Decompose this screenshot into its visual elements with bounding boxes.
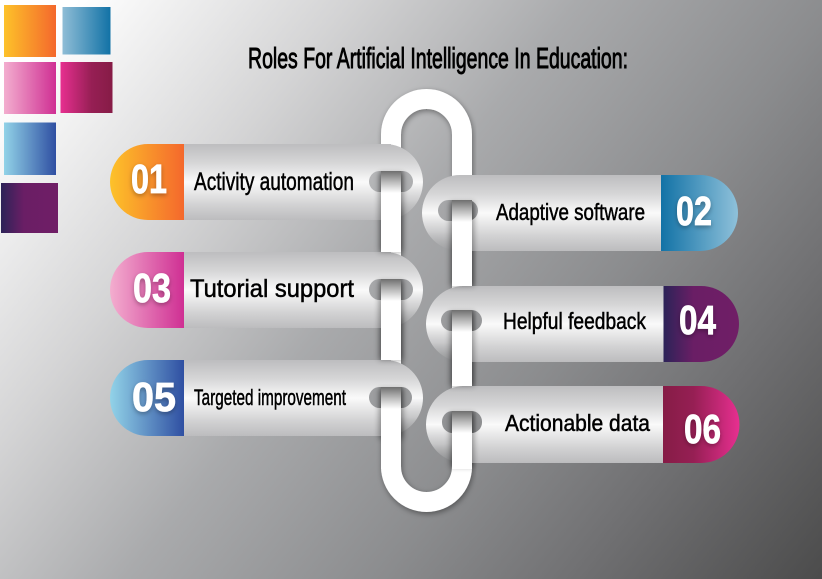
label: Targeted improvement: Targeted improvement (194, 385, 346, 410)
left strand over pills (379, 171, 403, 469)
number 01: 01 (131, 156, 167, 202)
title: Roles For Artificial Intelligence In Education: (248, 43, 628, 75)
number 05: 05 (132, 374, 176, 420)
label: Activity automation: Activity automation (194, 168, 354, 196)
chain loop (391, 99, 462, 502)
number 04: 04 (679, 297, 716, 343)
number 03: 03 (133, 265, 171, 311)
number 06: 06 (684, 406, 721, 452)
label: Adaptive software: Adaptive software (496, 199, 645, 225)
number 02: 02 (676, 188, 712, 234)
label: Helpful feedback: Helpful feedback (503, 308, 646, 334)
right strand over pills (450, 200, 474, 469)
pill 01: Activity automation (110, 144, 423, 220)
pill 05: Targeted improvement (110, 360, 423, 436)
pill 03: Tutorial support (110, 252, 423, 328)
pill 06: Actionable data (426, 386, 740, 463)
pill 04: Helpful feedback (426, 286, 739, 362)
label: Actionable data: Actionable data (505, 410, 650, 436)
colour swatches (1, 5, 112, 233)
pill 02: Adaptive software (422, 175, 738, 251)
label: Tutorial support: Tutorial support (190, 275, 354, 303)
